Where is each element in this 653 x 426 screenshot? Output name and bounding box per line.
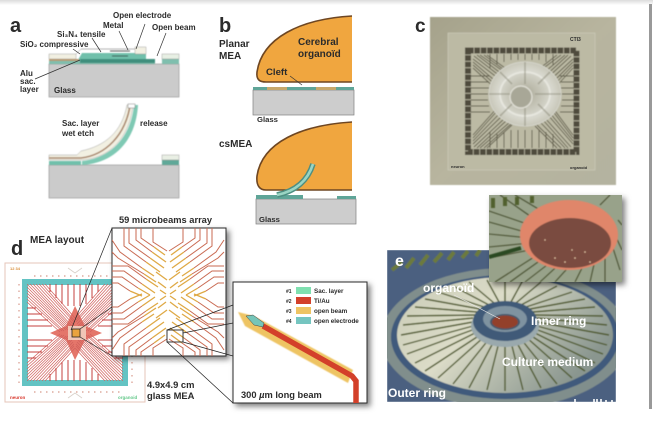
panel a: beam fabrication cross-sections — [10, 11, 196, 198]
radial electrode traces — [401, 279, 609, 391]
leader lines — [35, 24, 166, 79]
labels on rendering: Culture medium — [502, 355, 593, 369]
upper diagram labels: Open electrode — [113, 11, 172, 20]
star centre — [50, 306, 102, 360]
organoid top labels: Cerebral — [298, 37, 339, 48]
labels on rendering: Outer ring — [388, 386, 446, 400]
label b: b — [219, 15, 231, 37]
photo: organoid — [570, 165, 588, 170]
layout sheet — [5, 263, 145, 402]
upper diagram labels: SiO₂ compressive — [20, 40, 89, 49]
organoid — [492, 316, 518, 328]
legend — [286, 287, 359, 325]
upper diagram labels: layer — [20, 85, 39, 94]
side tick marks — [34, 276, 120, 392]
microbeam zoom window — [112, 228, 226, 362]
panel b: planar MEA vs csMEA: MEA — [219, 51, 241, 62]
outer pad traces — [392, 250, 480, 270]
labels on rendering: Inner ring — [531, 314, 586, 328]
panel d: MEA layout: glass MEA — [147, 390, 195, 401]
organoid bottom — [257, 122, 352, 190]
label e: e — [395, 253, 404, 270]
upper cross-section diagram — [49, 47, 179, 97]
beam detail window — [233, 282, 367, 403]
upper diagram labels: Open beam — [152, 23, 196, 32]
upper diagram labels: Si₃N₄ tensile — [57, 30, 106, 39]
upper diagram labels: Metal — [103, 21, 123, 30]
label a: a — [10, 15, 22, 37]
legend: Sac. layer — [314, 288, 344, 295]
lower diagram labels: wet etch — [61, 129, 94, 138]
legend: open electrode — [314, 318, 359, 325]
small orange centre — [68, 326, 86, 340]
upper diagram labels: Alu — [20, 69, 33, 78]
glass disk — [397, 277, 613, 393]
leader organoid — [454, 295, 500, 319]
layout sheet: 12 34 — [10, 266, 21, 271]
lower cross-section: released beam — [49, 104, 179, 198]
lower diagram labels — [61, 119, 168, 138]
array heading: 59 microbeams array — [119, 215, 213, 225]
legend: open beam — [314, 308, 348, 315]
MEA layout heading: MEA layout — [30, 235, 85, 246]
zoom leader lines — [71, 228, 112, 356]
panel b: planar MEA vs csMEA: organoïd — [298, 49, 341, 60]
panel b: planar MEA vs csMEA: Cleft — [266, 67, 288, 78]
labels on rendering — [388, 281, 593, 400]
size caption: 4.9x4.9 cm — [147, 379, 194, 390]
detail leader lines — [167, 305, 233, 403]
panel b: planar MEA vs csMEA: Glass — [259, 215, 280, 224]
planar MEA heading: Planar — [219, 39, 250, 50]
legend: #2 — [286, 299, 292, 305]
photo captions: neuron — [451, 164, 465, 169]
lower diagram labels: release — [140, 119, 168, 128]
labels on rendering: organoïd — [423, 281, 474, 295]
beam drawing — [238, 312, 353, 383]
teal pad ring — [25, 282, 125, 383]
panel d: MEA layout — [5, 215, 367, 403]
label c: c — [415, 16, 426, 37]
upper diagram labels — [20, 11, 196, 95]
panel e: culture setup rendering — [381, 195, 629, 408]
layout sheet: organoid — [118, 395, 137, 400]
electrode traces — [471, 54, 574, 148]
panel b: planar MEA vs csMEA — [219, 15, 356, 224]
beam caption: 300 µm long beam — [241, 390, 322, 400]
red traces — [27, 284, 123, 381]
electrode pad ring — [468, 50, 576, 152]
glass culture ring — [489, 62, 561, 126]
main rendering — [387, 250, 616, 402]
legend: Ti/Au — [314, 298, 330, 305]
inner ring — [470, 318, 540, 348]
lower diagram labels: Sac. layer — [62, 119, 99, 128]
photo — [430, 17, 616, 185]
sheet captions: neuron — [10, 395, 26, 400]
legend: #3 — [286, 309, 292, 315]
panel b: planar MEA vs csMEA: Glass — [257, 115, 278, 124]
planar glass substrate — [253, 87, 354, 115]
upper diagram labels: sac. — [20, 77, 36, 86]
photo: CTI3 — [570, 37, 581, 43]
organoid top — [257, 16, 352, 82]
csMEA heading: csMEA — [219, 139, 252, 150]
upper diagram labels: Glass — [54, 86, 76, 95]
panel c: MEA photograph — [415, 16, 616, 185]
legend: #4 — [286, 319, 292, 325]
legend: #1 — [286, 289, 292, 295]
label d: d — [11, 238, 23, 260]
csMEA substrate and released beam — [256, 164, 356, 224]
detail selection box — [167, 330, 183, 342]
inset close-up — [489, 195, 622, 282]
organoid dome — [520, 200, 618, 270]
clipped footer fragment — [575, 399, 612, 402]
